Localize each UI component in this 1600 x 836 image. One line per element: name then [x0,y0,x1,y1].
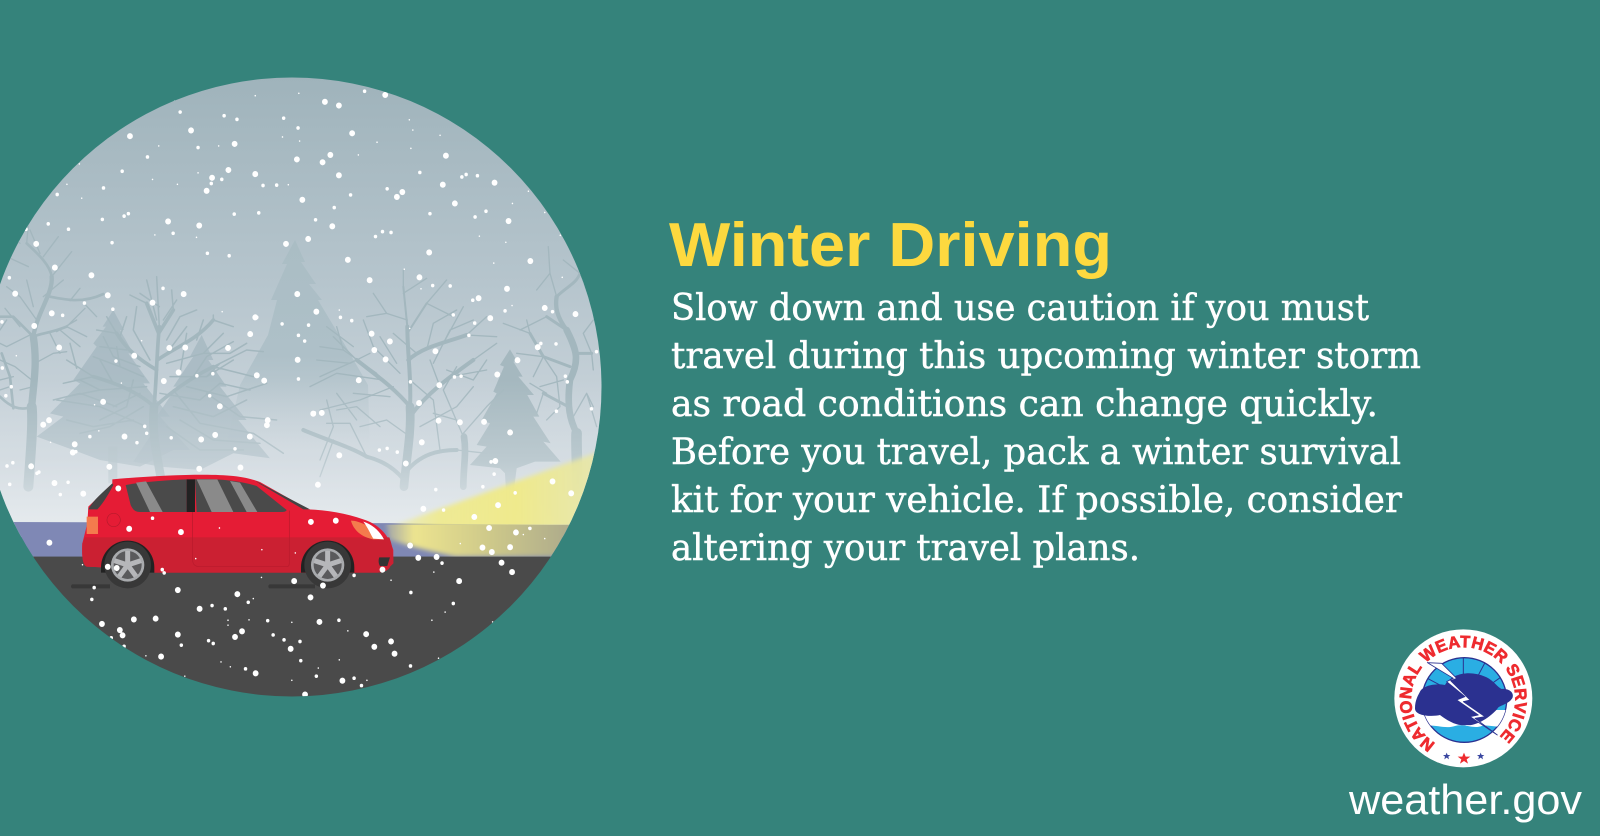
door lines [107,511,289,567]
wheel shadows [71,584,315,588]
front wheel [301,541,354,588]
ground mist [0,407,600,525]
bumper grille [379,557,390,566]
tree B [53,277,283,477]
left pine [37,311,162,466]
body text: as road conditions can change quickly. [671,384,1378,425]
bare trees and pines, left group [0,225,283,487]
headlight beam [385,451,594,557]
body text: altering your travel plans. [671,528,1140,569]
body text: kit for your vehicle. If possible, consider [671,480,1403,521]
far pine tree [236,254,368,404]
center pine [133,335,270,470]
logo ring path [1411,647,1515,743]
beam upper [392,451,594,525]
title: Winter Driving [669,211,1112,280]
logo disc [1394,629,1532,767]
rear side window [126,479,187,512]
rear window glare [136,481,163,512]
body text: travel during this upcoming winter storm [671,336,1421,377]
tree C [303,270,503,487]
rear wheel [101,541,154,588]
logo white band [1420,710,1510,727]
panel: snowy road scene circle [0,77,638,704]
tree A [0,225,103,487]
body text [671,288,1421,569]
door pillar [187,479,195,512]
bare trees and pines, right group [303,247,597,490]
lower body shade [82,537,393,573]
road surface [33,556,551,696]
logo stars [1443,753,1484,764]
logo lightning bolt [1427,663,1497,735]
road [0,452,638,704]
left pine trunk [108,462,118,483]
logo: National Weather Service [1394,629,1532,768]
headlight [351,521,384,539]
beam lower [385,524,569,557]
logo cloud [1415,673,1513,725]
logo ring text: NATIONAL WEATHER SERVICE [1399,635,1528,752]
headlight glare [363,522,384,539]
snowflakes [2,91,596,695]
front window glare [197,479,257,512]
distant road-side band [14,522,568,558]
car [71,475,393,588]
tree F [503,247,597,488]
tail light [87,517,98,534]
body text: Slow down and use caution if you must [671,288,1370,329]
car body [82,475,393,573]
sky [0,77,620,537]
logo sky and water bands [1420,657,1510,727]
logo sky rays [1427,657,1501,686]
body text: Before you travel, pack a winter survival [671,432,1401,473]
right pine [470,349,561,490]
logo sky circle [1422,658,1507,742]
windshield [255,481,310,509]
rear window [88,483,113,509]
website: weather.gov [1348,776,1582,823]
front side window [195,479,287,512]
